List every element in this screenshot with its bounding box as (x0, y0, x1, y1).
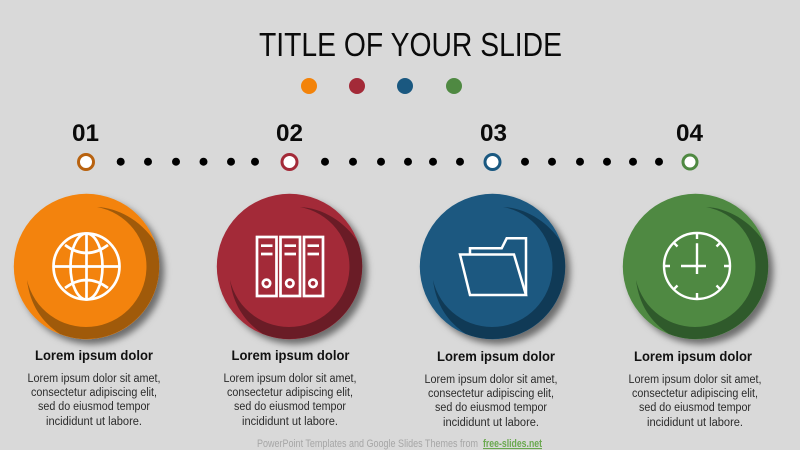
circle: orange (14, 194, 159, 339)
step numbers: 01 (72, 120, 99, 147)
text block: step 1: consectetur adipiscing elit, (31, 387, 157, 399)
text block: step 2: sed do eiusmod tempor (234, 401, 346, 413)
text block: step 4 (628, 349, 762, 429)
text block: step 2: Lorem ipsum dolor sit amet, (224, 373, 356, 385)
step numbers (72, 120, 704, 147)
text block: step 1: incididunt ut labore. (46, 416, 142, 428)
text block: step 3: sed do eiusmod tempor (435, 402, 547, 414)
text block: step 4: incididunt ut labore. (647, 417, 743, 429)
icon: clock (664, 233, 730, 299)
text block: step 1: Lorem ipsum dolor (35, 348, 154, 363)
step numbers: 03 (480, 120, 507, 147)
footer credit: free-slides.net (483, 438, 542, 450)
icon: binders (257, 237, 323, 296)
text block: step 4: Lorem ipsum dolor (634, 349, 753, 364)
text block: step 3 (424, 349, 558, 429)
circle: blue (420, 194, 565, 339)
text block: step 3: Lorem ipsum dolor sit amet, (424, 374, 558, 386)
timeline rings (78, 154, 697, 170)
text block: step 4: Lorem ipsum dolor sit amet, (628, 374, 762, 386)
icon: globe (54, 234, 120, 300)
colour key dots (301, 78, 462, 94)
text block: step 2 (224, 348, 356, 428)
circle: green (623, 194, 768, 339)
title: TITLE OF YOUR SLIDE (259, 26, 562, 63)
text block: step 3: incididunt ut labore. (443, 417, 539, 429)
icon: folder (460, 238, 526, 295)
text block: step 1 (28, 348, 160, 428)
text block: step 1: sed do eiusmod tempor (38, 401, 150, 413)
text block: step 2: consectetur adipiscing elit, (227, 387, 353, 399)
text block: step 2: incididunt ut labore. (242, 416, 338, 428)
text block: step 1: Lorem ipsum dolor sit amet, (28, 373, 160, 385)
text block: step 4: consectetur adipiscing elit, (632, 388, 758, 400)
step numbers: 04 (676, 120, 704, 147)
footer credit: PowerPoint Templates and Google Slides Themes from (257, 438, 478, 450)
text block: step 4: sed do eiusmod tempor (639, 402, 751, 414)
timeline dots (117, 158, 663, 166)
text block: step 2: Lorem ipsum dolor (232, 348, 350, 363)
step numbers: 02 (276, 120, 303, 147)
text block: step 3: consectetur adipiscing elit, (428, 388, 554, 400)
text block: step 3: Lorem ipsum dolor (437, 349, 556, 364)
circle: red (217, 194, 362, 339)
